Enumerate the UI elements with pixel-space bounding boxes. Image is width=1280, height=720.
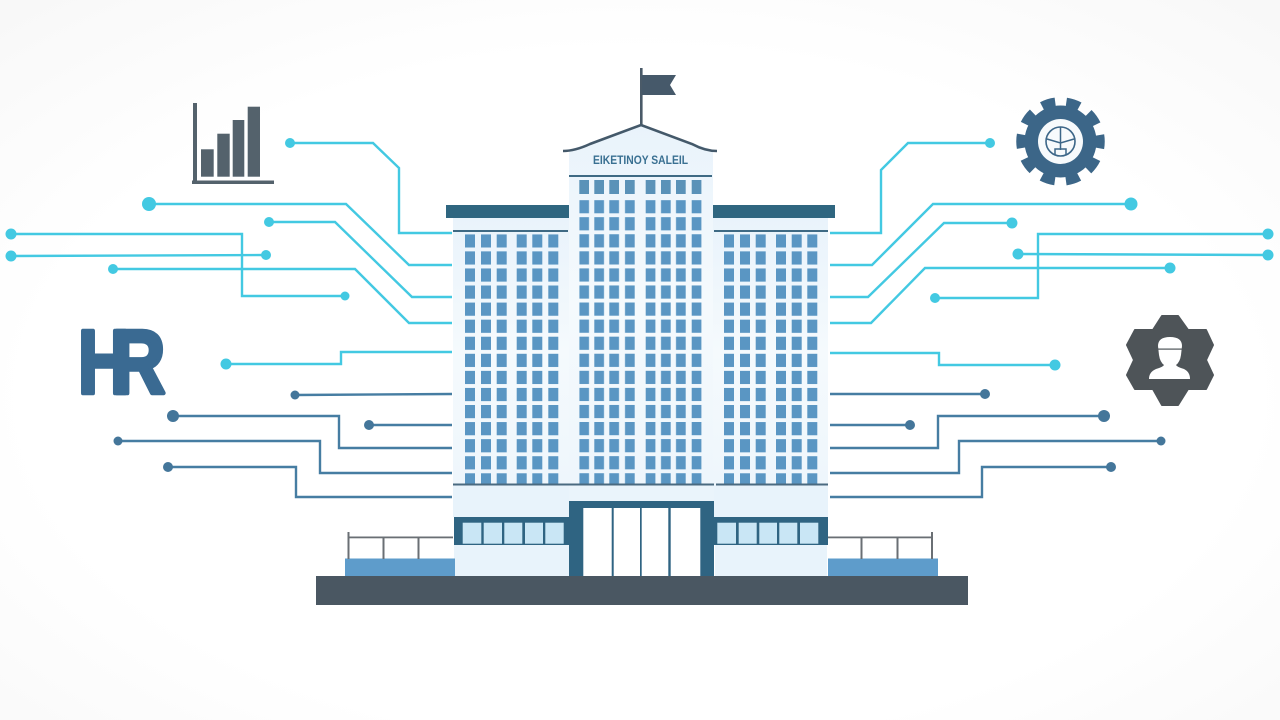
right roof slab	[711, 205, 835, 218]
office building	[316, 68, 968, 605]
right terrace with railing	[828, 532, 938, 576]
cyan line 3 right	[830, 218, 1018, 297]
cyan line to bar chart	[285, 138, 452, 233]
left terrace with railing	[345, 532, 455, 576]
cyan line 3	[264, 217, 452, 297]
left connector lines	[6, 138, 452, 497]
right wing	[713, 218, 828, 485]
left wing	[453, 218, 569, 485]
icon: HR letters: H	[78, 312, 130, 413]
blue line 9 right	[830, 410, 1110, 448]
podium left	[453, 484, 570, 576]
blue line 11 right	[830, 436, 1166, 473]
cyan line 2 right	[830, 198, 1138, 265]
cyan line 5	[6, 228, 350, 300]
cyan line 4	[108, 264, 452, 323]
cyan line 4 right	[830, 262, 1176, 323]
ground base	[316, 576, 968, 605]
blue line 9	[167, 410, 452, 448]
right connector lines	[830, 138, 1274, 497]
building sign: EIKETINOY SALEIL	[593, 155, 688, 167]
flag	[640, 68, 676, 126]
icon: bar chart	[192, 103, 274, 184]
cyan line 6	[6, 250, 271, 262]
icon: HR letters	[78, 312, 165, 413]
cyan line 5 right	[930, 228, 1274, 303]
central entrance	[569, 484, 714, 576]
blue line 10	[364, 420, 452, 430]
blue line 10 right	[830, 420, 915, 430]
central tower	[569, 126, 713, 485]
icon: HR letters: R	[112, 313, 165, 413]
blue line 11	[114, 436, 452, 473]
cyan line 7	[220, 352, 452, 370]
left roof slab	[446, 205, 569, 218]
blue line 12 right	[830, 462, 1116, 497]
blue line 8 right	[830, 389, 990, 399]
pediment roof	[563, 125, 717, 151]
icon: settings gear	[1022, 102, 1100, 180]
cyan line 6 right	[1012, 248, 1274, 260]
cyan line to gear	[830, 138, 995, 233]
blue line 8	[290, 390, 452, 400]
blue line 12	[163, 462, 452, 497]
podium right	[714, 484, 828, 576]
cyan line 7 right	[830, 353, 1060, 370]
icon: person gear	[1127, 316, 1213, 405]
cyan line 2	[142, 197, 452, 265]
